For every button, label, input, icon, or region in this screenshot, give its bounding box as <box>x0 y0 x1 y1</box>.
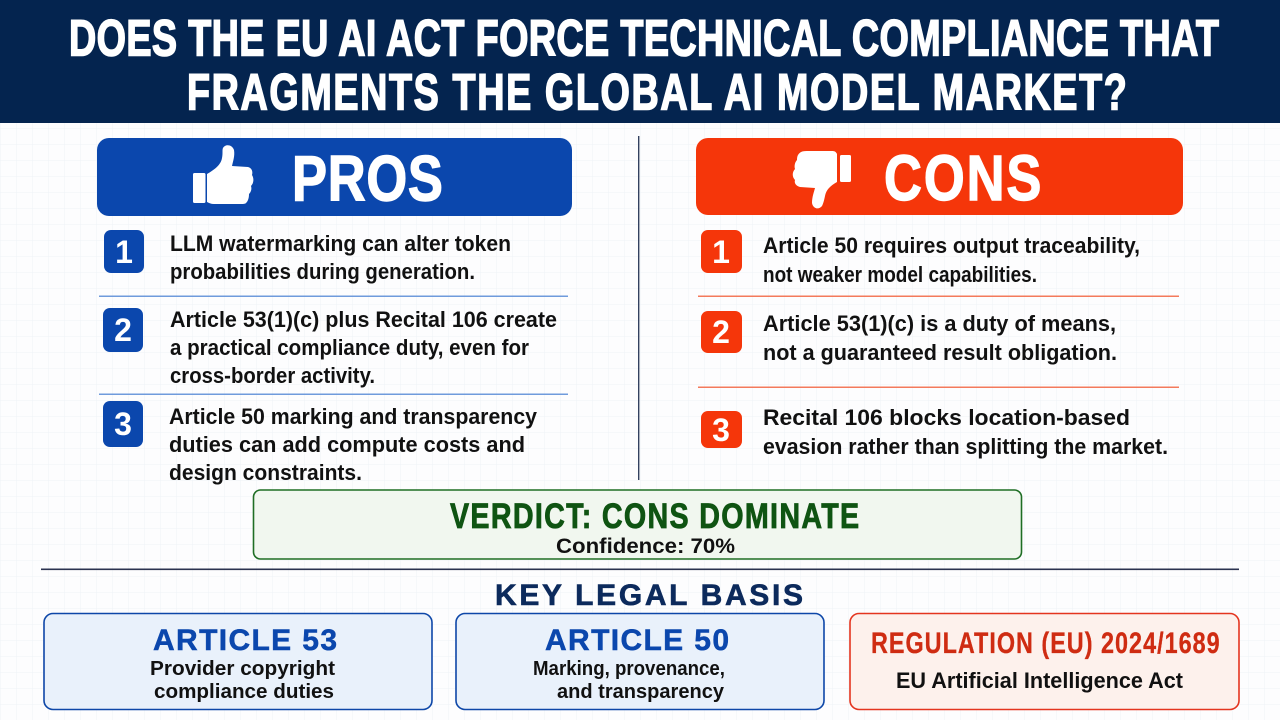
con item 3: Recital 106 blocks location-based <box>763 405 1130 430</box>
pro item 3 <box>103 401 538 485</box>
pro item 3: 3 <box>114 406 132 442</box>
pro item 1: LLM watermarking can alter token <box>170 231 511 256</box>
title <box>69 9 1219 121</box>
pros heading: PROS <box>292 144 443 215</box>
pro item 2: cross-border activity. <box>170 363 375 388</box>
pro item 3: design constraints. <box>169 460 362 485</box>
card: regulation: REGULATION (EU) 2024/1689 <box>871 626 1220 660</box>
con item 2: 2 <box>712 314 730 350</box>
con item 3: evasion rather than splitting the market. <box>763 434 1168 459</box>
card: article 50: and transparency <box>557 681 725 703</box>
cons heading: CONS <box>884 143 1041 214</box>
title: FRAGMENTS THE GLOBAL AI MODEL MARKET? <box>187 63 1127 121</box>
icon: thumbs up <box>193 145 253 204</box>
pro item 3: duties can add compute costs and <box>169 432 525 457</box>
pros heading <box>97 138 572 216</box>
con item 1: 1 <box>712 234 730 270</box>
con item 2 <box>701 311 1117 365</box>
con item 1 <box>701 230 1140 287</box>
con item 2: not a guaranteed result obligation. <box>763 340 1117 365</box>
card: article 50: ARTICLE 50 <box>545 624 729 657</box>
panel: pros <box>97 138 572 485</box>
panel: cons <box>696 138 1183 459</box>
card: article 50 <box>456 614 824 710</box>
verdict box: Confidence: 70% <box>556 535 735 558</box>
card: regulation: EU Artificial Intelligence Act <box>896 668 1184 693</box>
pro item 2: 2 <box>114 312 132 348</box>
con item 1: Article 50 requires output traceability, <box>763 233 1140 258</box>
pro item 3: Article 50 marking and transparency <box>169 404 538 429</box>
verdict box: VERDICT: CONS DOMINATE <box>450 496 859 536</box>
con item 3 <box>701 405 1168 459</box>
card: article 53 <box>44 614 432 710</box>
card: regulation <box>850 614 1239 710</box>
key legal basis heading: KEY LEGAL BASIS <box>495 579 803 612</box>
card: article 53: compliance duties <box>154 681 334 703</box>
verdict box <box>254 490 1022 559</box>
card: article 50: Marking, provenance, <box>533 658 725 680</box>
header banner <box>0 0 1280 123</box>
card: article 53: ARTICLE 53 <box>153 624 337 657</box>
pro item 2 <box>103 307 557 388</box>
pro item 1 <box>104 230 511 284</box>
card: article 53: Provider copyright <box>150 658 335 680</box>
icon: thumbs down <box>793 151 851 208</box>
pro item 2: a practical compliance duty, even for <box>170 335 529 360</box>
con item 1: not weaker model capabilities. <box>763 262 1037 287</box>
center divider <box>638 136 639 480</box>
pro item 1: probabilities during generation. <box>170 259 475 284</box>
pro item 1: 1 <box>115 234 133 270</box>
cons heading <box>696 138 1183 215</box>
con item 2: Article 53(1)(c) is a duty of means, <box>763 311 1116 336</box>
pro item 2: Article 53(1)(c) plus Recital 106 create <box>170 307 557 332</box>
title: DOES THE EU AI ACT FORCE TECHNICAL COMPLIANCE THAT <box>69 9 1219 67</box>
con item 3: 3 <box>712 412 730 448</box>
